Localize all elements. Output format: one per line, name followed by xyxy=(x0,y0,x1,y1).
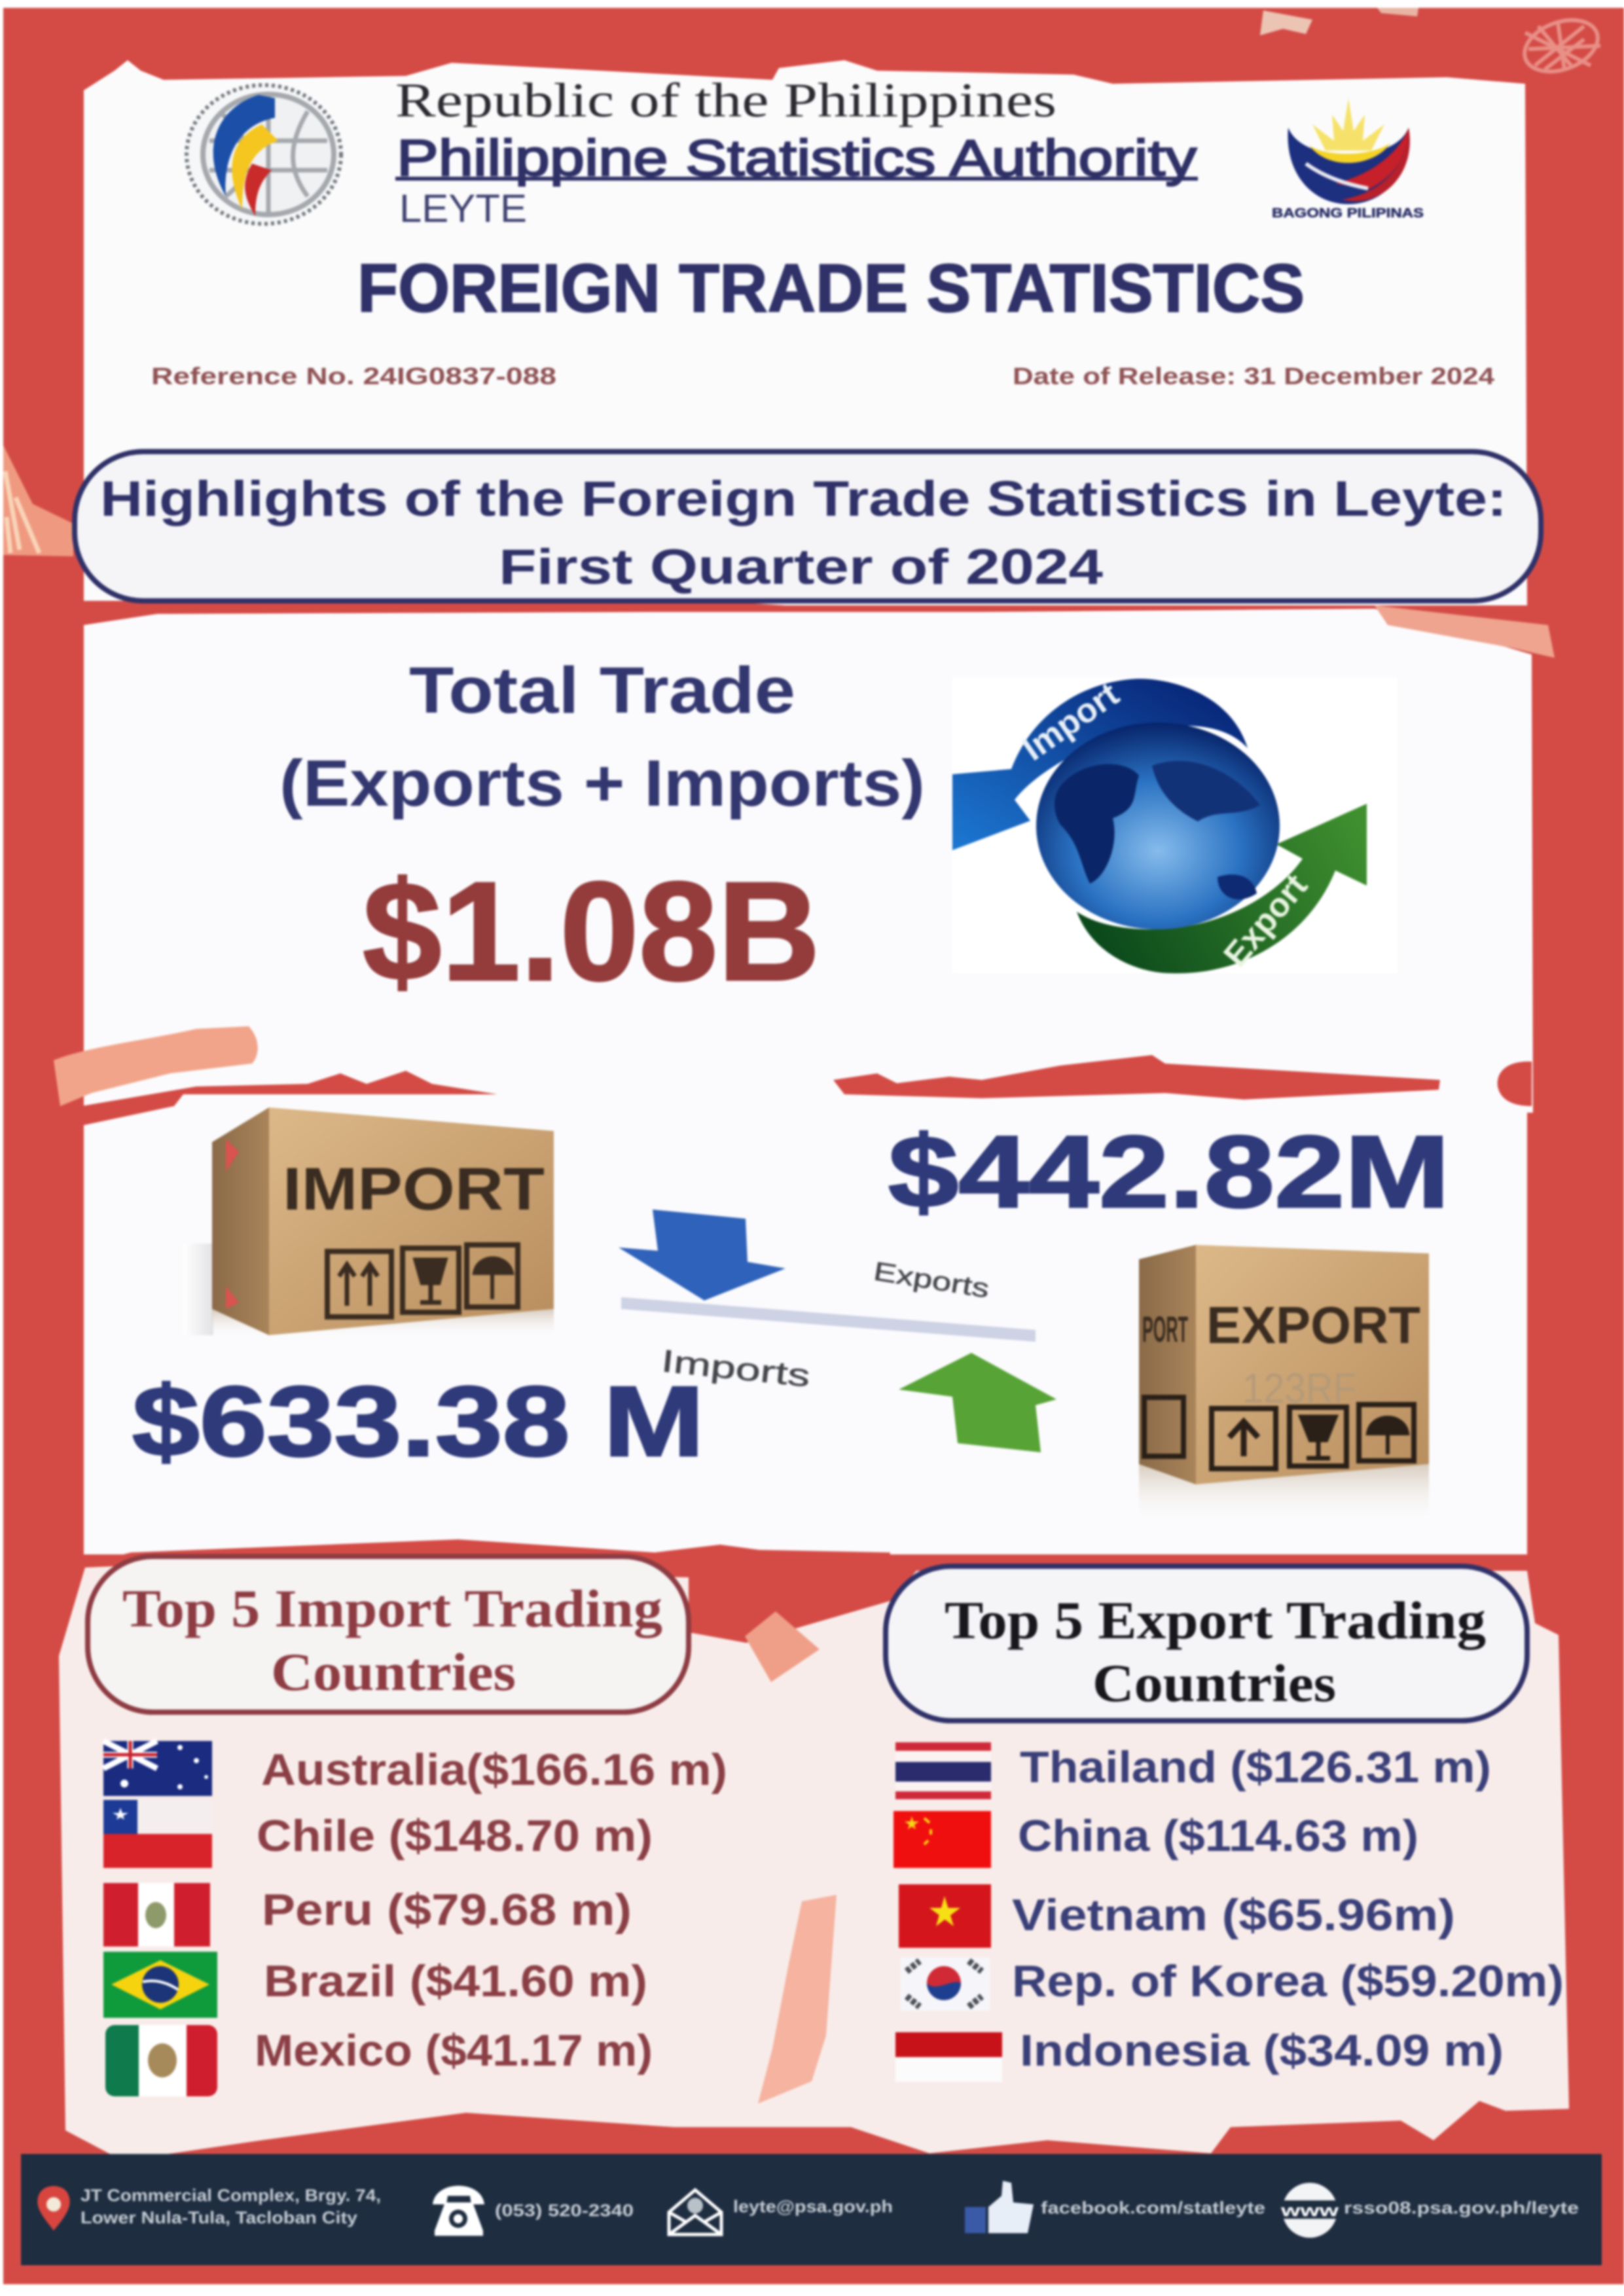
heading: total trade xyxy=(280,654,925,820)
pill heading: top 5 export: Top 5 Export Trading xyxy=(945,1590,1486,1650)
flag: Korea xyxy=(901,1958,990,2011)
title: FOREIGN TRADE STATISTICS xyxy=(357,251,1305,327)
scrap: salmon note xyxy=(745,1611,820,1682)
pill heading: top 5 export: Countries xyxy=(1092,1653,1336,1713)
divider bar between exports and imports xyxy=(621,1297,1036,1342)
flag: Mexico xyxy=(105,2025,217,2096)
icon: web globe xyxy=(1280,2183,1340,2238)
import country list: Brazil ($41.60 m) xyxy=(264,1956,647,2006)
icon: globe with import and export arrows: Import xyxy=(1016,675,1126,768)
footer text: phone: (053) 520-2340 xyxy=(495,2200,634,2220)
highlights pill heading: Highlights of the Foreign Trade Statistics in Leyte: xyxy=(100,471,1507,527)
agency name: Republic of the Philippines: Republic of the Philippines xyxy=(395,74,1056,128)
reference number: Reference No. 24IG0837-088 xyxy=(151,363,556,389)
arrow: green up xyxy=(899,1353,1056,1452)
icon: telephone xyxy=(433,2186,484,2236)
footer text: website: rsso08.psa.gov.ph/leyte xyxy=(1344,2198,1579,2217)
panel: trade values torn paper xyxy=(84,1100,1527,1554)
torn divider: left red sliver xyxy=(62,1071,497,1129)
highlights pill heading: First Quarter of 2024 xyxy=(499,539,1103,595)
footer text: address: JT Commercial Complex, Brgy. 74, xyxy=(81,2185,381,2205)
scraps: top right decoration xyxy=(1260,8,1605,81)
highlights pill heading xyxy=(75,452,1541,601)
date of release: Date of Release: 31 December 2024 xyxy=(1013,363,1494,389)
logo: Philippine Statistics Authority xyxy=(184,84,344,225)
panel: header torn paper xyxy=(84,60,1527,605)
footer text: email: leyte@psa.gov.ph xyxy=(733,2197,893,2216)
footer text: address: Lower Nula-Tula, Tacloban City xyxy=(81,2208,358,2227)
flag: Chile xyxy=(103,1800,212,1868)
flag: Vietnam xyxy=(899,1884,991,1948)
export country list xyxy=(1012,1742,1564,2075)
export country list: Vietnam ($65.96m) xyxy=(1012,1890,1455,1940)
agency name: Philippine Statistics Authority: Philippine Statistics Authority xyxy=(397,129,1197,187)
export country list: Rep. of Korea ($59.20m) xyxy=(1012,1956,1564,2006)
pill heading: top 5 export xyxy=(886,1566,1527,1721)
scrap: salmon strip right of total trade xyxy=(1375,605,1555,658)
red torn band above pills xyxy=(85,1539,890,1643)
footer bar xyxy=(21,2154,1602,2265)
icon: globe with import and export arrows: Export xyxy=(1217,867,1315,974)
icon: thumbs up xyxy=(965,2181,1034,2233)
logo: Bagong Pilipinas xyxy=(1272,98,1424,221)
footer text: address xyxy=(81,2185,381,2227)
flag: Australia xyxy=(103,1741,212,1796)
import country list xyxy=(255,1745,727,2075)
icon: web globe: www xyxy=(1280,2200,1339,2220)
panel: top countries torn paper xyxy=(59,1551,1569,2155)
flag: Indonesia xyxy=(895,2032,1002,2082)
import country list: Mexico ($41.17 m) xyxy=(255,2026,653,2075)
import country list: Peru ($79.68 m) xyxy=(262,1885,632,1935)
value: exports: $442.82M xyxy=(888,1115,1450,1229)
value: total trade: $1.08B xyxy=(363,852,820,1010)
scrap: long salmon strip xyxy=(758,1895,837,2104)
icon: import box xyxy=(183,1107,554,1338)
heading: total trade: Total Trade xyxy=(409,654,795,727)
flag: Brazil xyxy=(103,1952,217,2018)
import country list: Australia($166.16 m) xyxy=(261,1745,727,1795)
icon: import box: IMPORT xyxy=(283,1156,545,1223)
torn divider: right red blob xyxy=(1498,1062,1532,1106)
import country list: Chile ($148.70 m) xyxy=(257,1811,653,1861)
export country list: Indonesia ($34.09 m) xyxy=(1020,2026,1504,2075)
icon: globe with import and export arrows xyxy=(952,675,1398,974)
label: imports: Imports xyxy=(660,1344,812,1394)
icon: export box: 123RF xyxy=(1242,1365,1356,1412)
export country list: China ($114.63 m) xyxy=(1018,1811,1418,1861)
panel: total trade torn paper xyxy=(84,609,1533,1113)
flag: Peru xyxy=(103,1883,210,1946)
footer text: facebook: facebook.com/statleyte xyxy=(1041,2198,1265,2217)
torn divider: right red sliver xyxy=(833,1055,1440,1100)
label: exports: Exports xyxy=(872,1257,991,1304)
icon: envelope xyxy=(669,2190,721,2234)
agency name: Leyte: LEYTE xyxy=(399,187,527,230)
value: imports: $633.38 M xyxy=(132,1366,704,1477)
arrow: blue down xyxy=(619,1210,785,1300)
icon: export box xyxy=(1139,1245,1429,1525)
logo: Bagong Pilipinas: BAGONG PILIPINAS xyxy=(1272,206,1424,221)
pill heading: top 5 import: Countries xyxy=(271,1642,516,1702)
brush stroke scrap xyxy=(54,1026,258,1106)
pill heading: top 5 import xyxy=(88,1556,689,1712)
icon: export box: EXPORT xyxy=(1206,1296,1420,1354)
export country list: Thailand ($126.31 m) xyxy=(1020,1742,1491,1792)
icon: export box: PORT xyxy=(1142,1308,1188,1350)
flag: China xyxy=(893,1811,991,1868)
flag: Thailand xyxy=(895,1742,991,1799)
scraps: left side salmon stripes xyxy=(3,445,73,556)
pill heading: top 5 import: Top 5 Import Trading xyxy=(122,1579,662,1638)
icon: location pin xyxy=(37,2186,70,2231)
heading: total trade: (Exports + Imports) xyxy=(280,747,925,820)
